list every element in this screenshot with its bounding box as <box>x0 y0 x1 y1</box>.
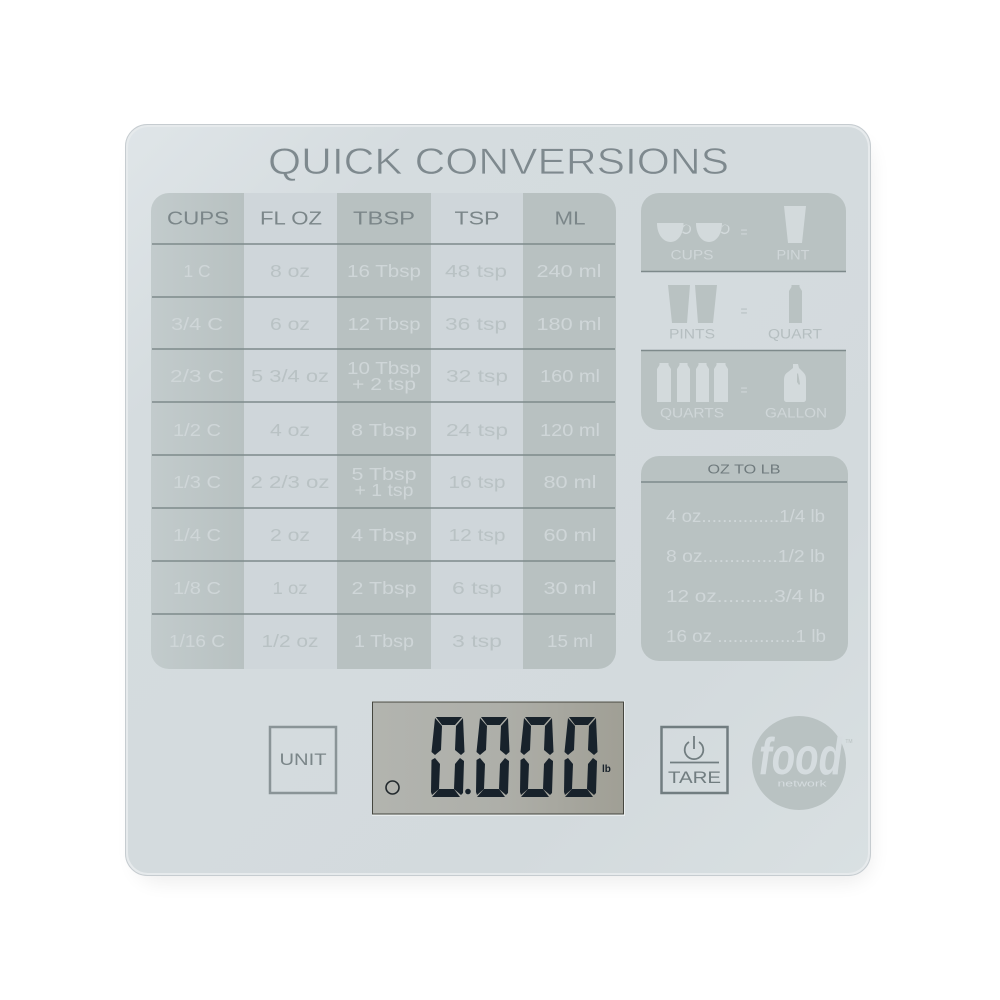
tsp column values: 32 tsp <box>446 366 508 386</box>
scale shadow <box>135 140 871 882</box>
oz to lb rows <box>666 506 826 646</box>
equals sign: = <box>740 224 748 241</box>
lcd display <box>372 701 625 816</box>
tbsp column values: 2 Tbsp <box>352 578 416 598</box>
labels: CUPS <box>670 248 714 262</box>
table headers: TSP <box>454 208 500 228</box>
panel: pints to quart <box>668 285 822 342</box>
tsp column values: 36 tsp <box>445 314 507 334</box>
panel: quarts to gallon <box>641 350 846 430</box>
icon: two pint glasses <box>668 285 717 323</box>
fl oz column values: 1 oz <box>272 578 308 598</box>
tbsp column values: 8 Tbsp <box>351 420 417 440</box>
fl oz column values: 6 oz <box>270 314 310 334</box>
tsp column values: 24 tsp <box>446 420 508 440</box>
tbsp column values: 10 Tbsp <box>347 358 421 378</box>
icon: power <box>685 736 703 759</box>
unit button: UNIT <box>280 751 326 769</box>
icon: two cups <box>657 223 730 242</box>
equals sign: = <box>740 303 748 320</box>
lcd unit: lb <box>602 764 611 775</box>
cups column values: 2/3 C <box>170 366 224 386</box>
tbsp column values: 5 Tbsp <box>352 464 416 484</box>
logo: food network: network <box>778 778 827 788</box>
cups column values: 1/8 C <box>173 578 221 598</box>
icon: quart carton <box>789 285 802 323</box>
fl oz column values: 4 oz <box>270 420 310 440</box>
cups column values: 1/16 C <box>169 631 225 651</box>
unit button <box>270 727 336 793</box>
cups column values: 1/3 C <box>173 472 221 492</box>
tbsp column values: + 2 tsp <box>352 374 416 394</box>
tbsp column values <box>347 261 421 651</box>
oz to lb rows: 8 oz..............1/2 lb <box>666 546 825 566</box>
tsp column values: 12 tsp <box>448 525 506 545</box>
tsp column values: 6 tsp <box>452 578 502 598</box>
table headers: CUPS <box>167 208 229 228</box>
tbsp column values: 4 Tbsp <box>351 525 417 545</box>
fl oz column values: 2 2/3 oz <box>250 472 330 492</box>
labels: QUART <box>768 326 822 342</box>
cups column values: 1 C <box>184 261 210 281</box>
table headers: FL OZ <box>260 208 322 228</box>
table column shading <box>151 193 616 669</box>
tbsp column values: + 1 tsp <box>354 480 414 500</box>
tbsp column values: 16 Tbsp <box>347 261 421 281</box>
fl oz column values: 8 oz <box>270 261 310 281</box>
tbsp column values: 12 Tbsp <box>348 314 420 334</box>
title: QUICK CONVERSIONS <box>268 141 729 182</box>
ml column values <box>536 261 602 651</box>
cups column values: 1/4 C <box>173 525 221 545</box>
tsp column values: 48 tsp <box>445 261 507 281</box>
lcd stable indicator <box>386 781 399 794</box>
tsp column values: 3 tsp <box>452 631 502 651</box>
oz to lb rows: 4 oz...............1/4 lb <box>666 506 825 526</box>
tsp column values: 16 tsp <box>448 472 506 492</box>
table headers: TBSP <box>353 208 415 228</box>
scale glass body <box>125 124 871 876</box>
table headers <box>167 208 586 228</box>
oz to lb rows: 12 oz..........3/4 lb <box>666 586 825 606</box>
ml column values: 160 ml <box>540 366 600 386</box>
ml column values: 120 ml <box>540 420 600 440</box>
icon: gallon jug <box>784 364 806 402</box>
equals sign: = <box>740 382 748 399</box>
fl oz column values: 1/2 oz <box>262 631 318 651</box>
logo: food network: TM <box>845 739 853 745</box>
oz to lb rows: 16 oz ...............1 lb <box>666 626 826 646</box>
labels <box>670 248 810 262</box>
labels <box>660 406 827 420</box>
oz to lb heading: OZ TO LB <box>708 462 780 476</box>
fl oz column values <box>250 261 330 651</box>
cups column values <box>169 261 225 651</box>
panel: conversion table <box>151 193 616 669</box>
ml column values: 240 ml <box>536 261 602 281</box>
cups column values: 3/4 C <box>171 314 223 334</box>
labels: PINT <box>776 248 810 262</box>
labels <box>669 326 822 342</box>
logo: food network: food <box>759 728 843 786</box>
panel: cups to pint <box>641 193 846 272</box>
tbsp column values: 1 Tbsp <box>354 631 414 651</box>
lcd digits <box>431 717 598 797</box>
tsp column values <box>445 261 508 651</box>
labels: QUARTS <box>660 406 724 420</box>
logo: food network <box>752 716 853 810</box>
fl oz column values: 5 3/4 oz <box>251 366 329 386</box>
ml column values: 180 ml <box>536 314 602 334</box>
ml column values: 60 ml <box>544 525 596 545</box>
ml column values: 15 ml <box>547 631 593 651</box>
labels: GALLON <box>765 406 827 420</box>
icon: four quart cartons <box>657 363 728 402</box>
table headers: ML <box>554 208 586 228</box>
fl oz column values: 2 oz <box>270 525 310 545</box>
cups column values: 1/2 C <box>173 420 221 440</box>
labels: PINTS <box>669 326 715 342</box>
ml column values: 30 ml <box>544 578 596 598</box>
panel: oz to lb <box>641 456 848 661</box>
tare button <box>662 727 728 793</box>
tare button: TARE <box>668 769 721 787</box>
icon: pint glass <box>784 206 806 243</box>
ml column values: 80 ml <box>544 472 596 492</box>
